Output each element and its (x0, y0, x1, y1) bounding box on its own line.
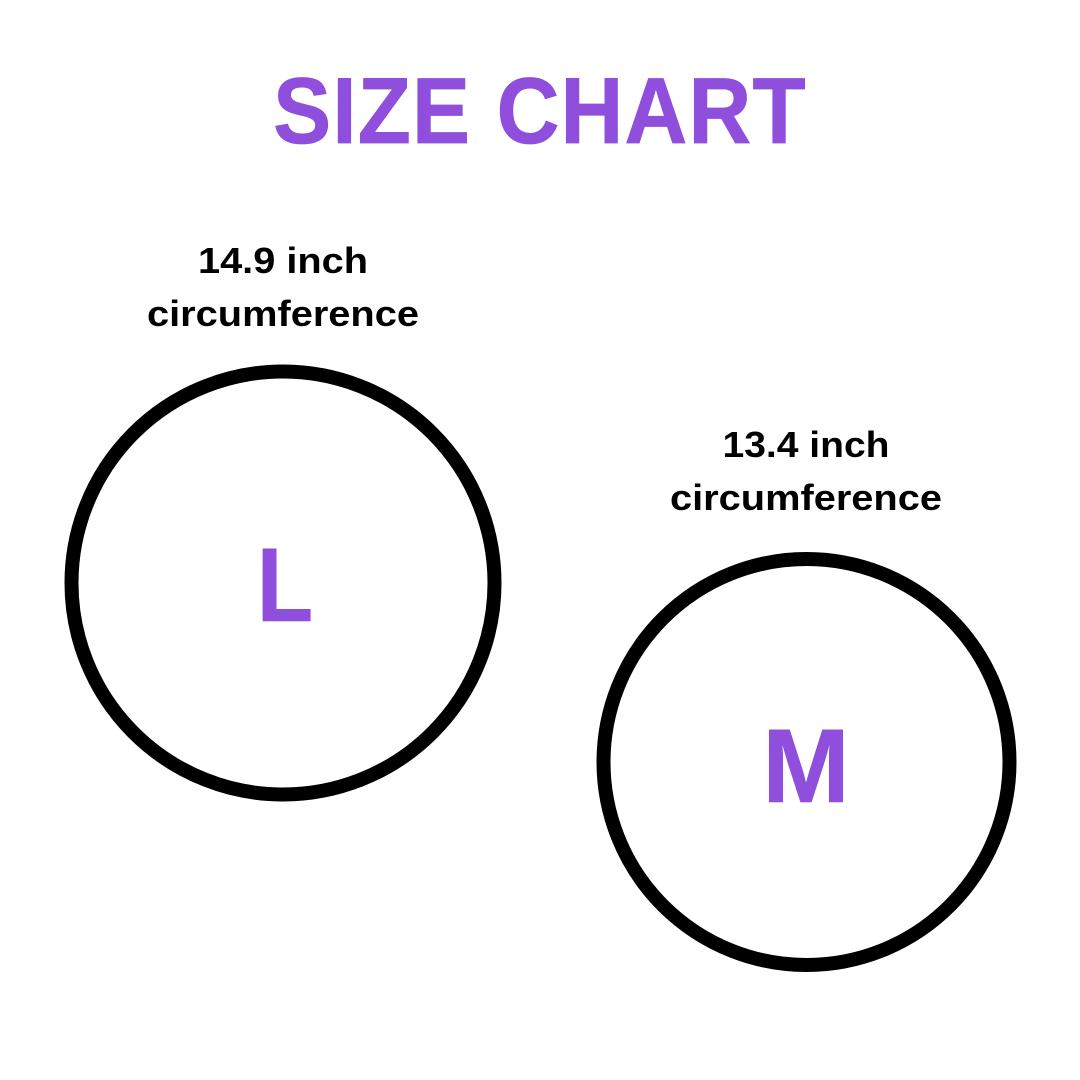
text: L circumference (147, 240, 419, 334)
panel: size M (604, 424, 1010, 965)
circle: L (72, 372, 494, 794)
letter: M: M (762, 708, 850, 825)
text: M circumference: circumference (670, 477, 942, 518)
text: L circumference: 14.9 inch (198, 240, 368, 281)
text: L circumference: circumference (147, 293, 419, 334)
panel: size L (72, 240, 494, 794)
text: M circumference (670, 424, 942, 518)
title: SIZE CHART (273, 59, 807, 164)
letter: L: L (257, 525, 313, 643)
circle: M (604, 559, 1010, 965)
text: M circumference: 13.4 inch (722, 424, 890, 465)
